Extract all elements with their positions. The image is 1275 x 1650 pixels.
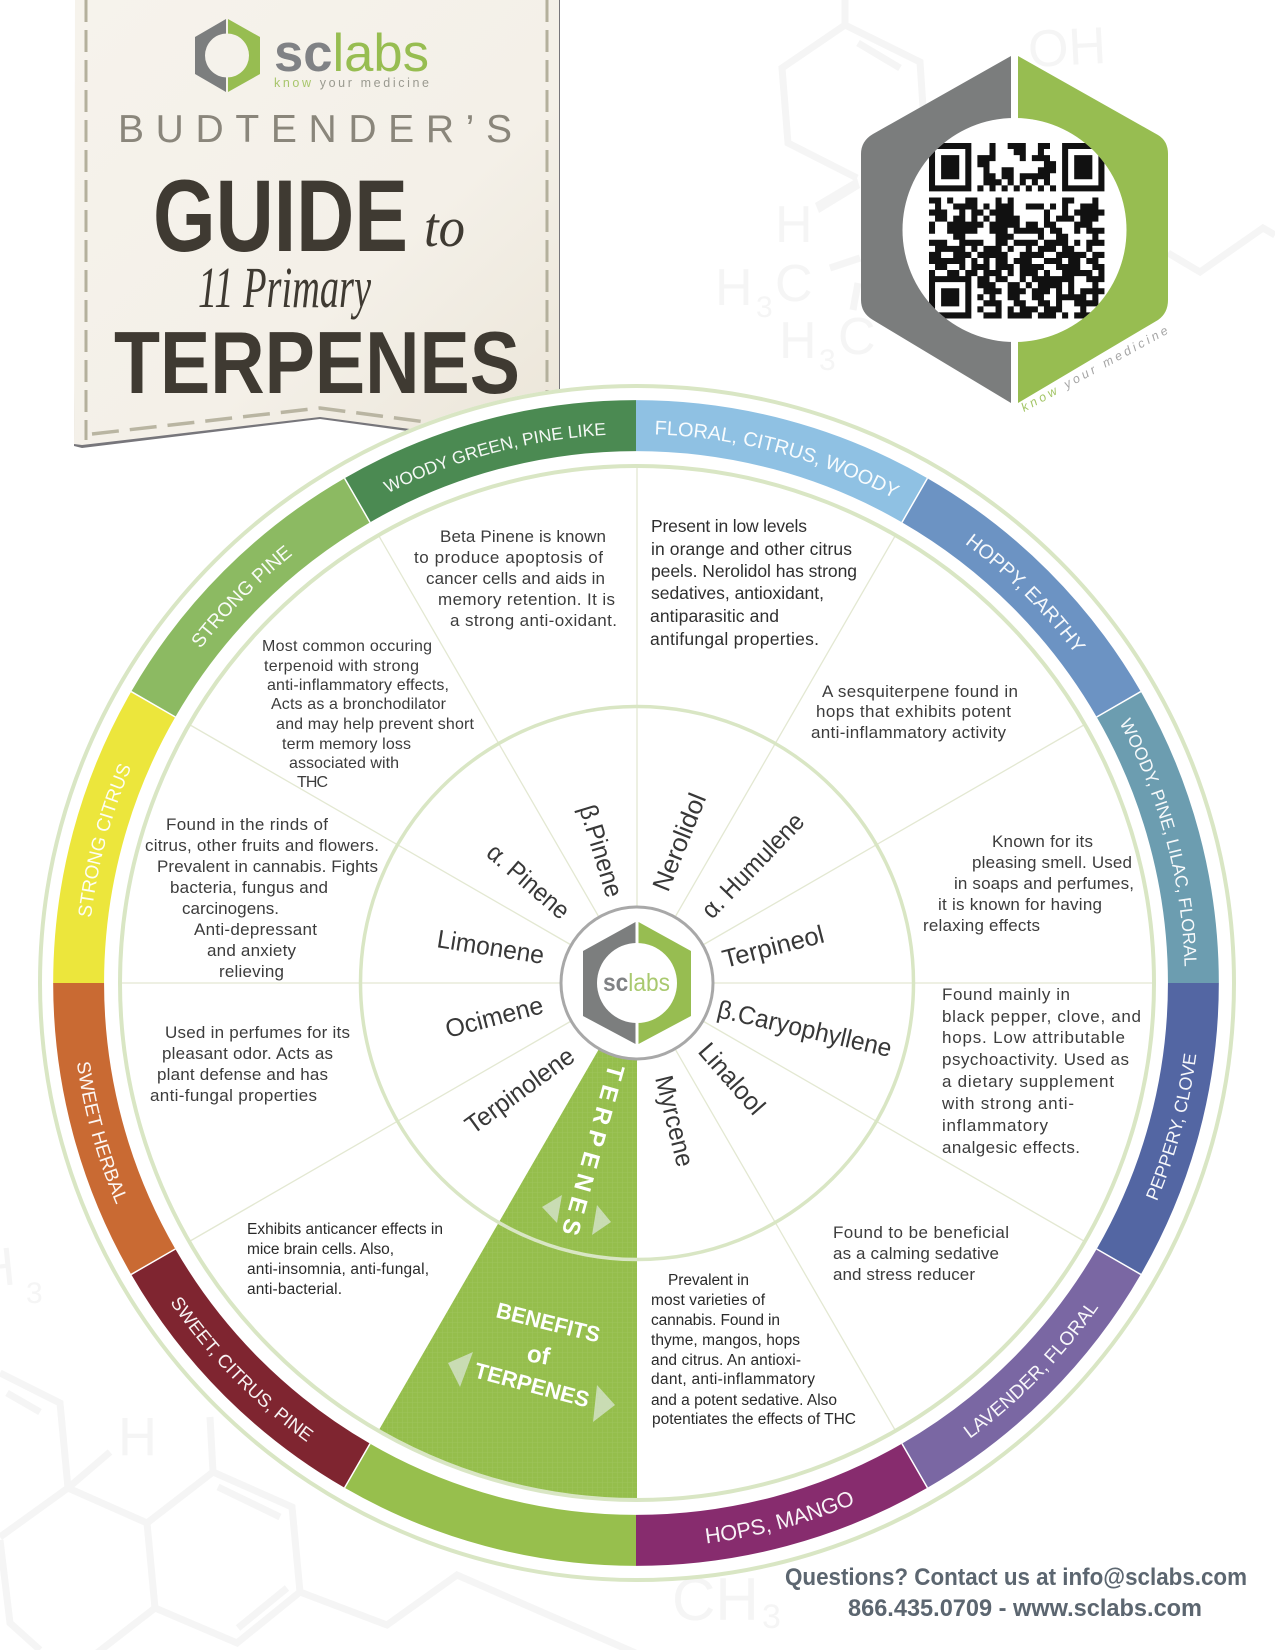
band: HOPPY, EARTHY: HOPPY, EARTHY bbox=[966, 534, 1086, 650]
text: Nerolidol description: Present in low levels bbox=[651, 516, 807, 536]
text: Ocimene description: pleasant odor. Acts as bbox=[162, 1044, 333, 1063]
text: Terpineol description: pleasing smell. Used bbox=[972, 853, 1132, 872]
title: GUIDE: GUIDE bbox=[153, 159, 408, 273]
band inner ring bbox=[120, 466, 1154, 1500]
band: WOODY, PINE, LILAC, FLORAL bbox=[1096, 692, 1219, 983]
text: Limonene description: relieving bbox=[219, 962, 284, 981]
text: Limonene description: citrus, other fruits and flowers. bbox=[145, 836, 379, 855]
band: FLORAL, CITRUS, WOODY: FLORAL, CITRUS, WOODY bbox=[656, 420, 900, 496]
text: Nerolidol description: sedatives, antioxidant, bbox=[651, 583, 824, 603]
arrow left bbox=[542, 1195, 562, 1223]
hexagon right half bbox=[1018, 56, 1168, 403]
terpene names bbox=[435, 789, 894, 1170]
text: Myrcene description: and citrus. An antioxi- bbox=[651, 1352, 801, 1369]
arrow right bbox=[593, 1385, 615, 1422]
background molecule: top right: OH bbox=[1027, 17, 1108, 79]
name circle ring bbox=[360, 706, 914, 1260]
background molecule: top right: C bbox=[838, 308, 876, 366]
name: Linalool: Linalool bbox=[692, 1037, 770, 1121]
wedge label: TERPENES: TERPENES bbox=[556, 1061, 629, 1238]
band: HOPPY, EARTHY bbox=[902, 478, 1141, 717]
wedge label: BENEFITS of TERPENES: BENEFITS bbox=[494, 1298, 603, 1347]
outer ring bbox=[40, 386, 1234, 1580]
background molecule: top right: H bbox=[775, 196, 813, 254]
text: Nerolidol description bbox=[650, 516, 857, 649]
text: Linalool description bbox=[833, 1223, 1009, 1284]
text: Myrcene description: and a potent sedative. Also bbox=[651, 1392, 837, 1409]
wedge label: BENEFITS of TERPENES bbox=[448, 1298, 615, 1422]
QR code hexagon bbox=[861, 56, 1170, 415]
text: Nerolidol description: peels. Nerolidol has strong bbox=[651, 561, 857, 581]
text: alpha Pinene description: THC bbox=[297, 774, 328, 791]
text: Caryophyllene description: hops. Low attributable bbox=[942, 1028, 1125, 1047]
title bbox=[114, 159, 520, 412]
wedge label: BENEFITS of TERPENES: of bbox=[525, 1340, 553, 1371]
text: Limonene description bbox=[145, 815, 379, 981]
text: Ocimene description bbox=[150, 1023, 350, 1105]
arrow right bbox=[592, 1205, 611, 1235]
band: green blank bbox=[345, 1444, 636, 1566]
text: alpha Pinene description: term memory loss bbox=[282, 736, 411, 753]
text: Myrcene description bbox=[651, 1272, 856, 1428]
band: HOPS, MANGO: HOPS, MANGO bbox=[706, 1492, 852, 1544]
background molecule: top right: H bbox=[779, 312, 817, 370]
ribbon banner bbox=[74, 0, 560, 452]
text: Limonene description: Found in the rinds of bbox=[166, 815, 328, 834]
text: beta Pinene description bbox=[414, 527, 617, 630]
text: Ocimene description: plant defense and has bbox=[157, 1065, 328, 1084]
text: beta Pinene description: cancer cells and aids in bbox=[426, 569, 605, 588]
name: Myrcene: Myrcene bbox=[649, 1073, 699, 1170]
footer contact: Questions? Contact us at info@sclabs.com bbox=[785, 1564, 1247, 1591]
text: Terpineol description: relaxing effects bbox=[923, 916, 1040, 935]
text: Limonene description: Prevalent in cannabis. Fights bbox=[157, 857, 378, 876]
name: alpha Pinene: α. Pinene bbox=[481, 838, 575, 925]
text: Linalool description: and stress reducer bbox=[833, 1265, 975, 1284]
text: Terpinolene description bbox=[247, 1221, 443, 1298]
text: Terpineol description: Known for its bbox=[992, 832, 1093, 851]
tagline: know your medicine bbox=[274, 76, 429, 90]
text: Limonene description: and anxiety bbox=[207, 941, 296, 960]
band: SWEET, CITRUS, PINE: SWEET, CITRUS, PINE bbox=[172, 1297, 314, 1442]
band: STRONG PINE: STRONG PINE bbox=[192, 545, 292, 647]
arrow left bbox=[448, 1352, 473, 1387]
text: alpha Pinene description: Most common occuring bbox=[262, 638, 432, 655]
text: Humulene description: A sesquiterpene found in bbox=[822, 682, 1018, 701]
band: WOODY GREEN, PINE LIKE: WOODY GREEN, PINE LIKE bbox=[382, 423, 606, 492]
wheel white disc bbox=[38, 384, 1236, 1582]
text: Terpinolene description: anti-insomnia, anti-fungal, bbox=[247, 1261, 429, 1278]
text: Terpineol description: in soaps and perfumes, bbox=[954, 874, 1134, 893]
text: Nerolidol description: in orange and other citrus bbox=[651, 539, 852, 559]
band: SWEET HERBAL bbox=[53, 983, 176, 1274]
footer contact bbox=[785, 1564, 1247, 1622]
text: Ocimene description: Used in perfumes for its bbox=[165, 1023, 350, 1042]
band: STRONG PINE bbox=[131, 478, 370, 717]
background molecule: bottom left: 3 bbox=[26, 1277, 43, 1310]
aroma band bbox=[53, 400, 1219, 1566]
text: Terpineol description: it is known for having bbox=[938, 895, 1102, 914]
text: Myrcene description: most varieties of bbox=[651, 1292, 766, 1309]
text: beta Pinene description: memory retention. It is bbox=[438, 590, 615, 609]
background molecule: top right: 3 bbox=[756, 291, 773, 324]
text: Limonene description: Anti-depressant bbox=[194, 920, 317, 939]
background molecule: top right bbox=[715, 0, 1275, 377]
name: Limonene: Limonene bbox=[435, 925, 546, 970]
text: Myrcene description: Prevalent in bbox=[668, 1272, 749, 1289]
green wedge bbox=[378, 1050, 637, 1500]
band: LAVENDER, FLORAL bbox=[902, 1249, 1141, 1488]
name: beta Caryophyllene: β.Caryophyllene bbox=[715, 996, 894, 1063]
text: Caryophyllene description: Found mainly in bbox=[942, 985, 1070, 1004]
icon: logo hexagon bbox=[195, 19, 260, 92]
band: STRONG CITRUS bbox=[53, 692, 176, 983]
name: beta Pinene: β.Pinene bbox=[573, 802, 628, 901]
tagline: know your medicine: know your medicine bbox=[1019, 323, 1170, 415]
hub wordmark: sclabs bbox=[603, 969, 670, 997]
text: Limonene description: carcinogens. bbox=[182, 899, 279, 918]
text: alpha Pinene description: terpenoid with strong bbox=[264, 658, 419, 675]
footer contact: 866.435.0709 - www.sclabs.com bbox=[848, 1595, 1202, 1622]
text: Caryophyllene description: psychoactivity. Used as bbox=[942, 1050, 1129, 1069]
background molecule: bottom left: H bbox=[118, 1407, 157, 1467]
text: Myrcene description: dant, anti-inflammatory bbox=[651, 1371, 815, 1388]
text: alpha Pinene description: associated with bbox=[289, 755, 399, 772]
text: Nerolidol description: antiparasitic and bbox=[650, 606, 779, 626]
text: Limonene description: bacteria, fungus and bbox=[170, 878, 328, 897]
title: TERPENES: TERPENES bbox=[114, 313, 520, 412]
name: Terpinolene: Terpinolene bbox=[460, 1042, 580, 1140]
text: alpha Pinene description: and may help prevent short bbox=[276, 716, 475, 733]
QR code bbox=[929, 146, 1104, 315]
band: STRONG CITRUS: STRONG CITRUS bbox=[78, 764, 130, 917]
background molecule: bottom left: CH bbox=[672, 1566, 759, 1633]
terpene wheel bbox=[38, 384, 1236, 1582]
text: Caryophyllene description: with strong anti- bbox=[941, 1094, 1074, 1113]
text: beta Pinene description: to produce apoptosis of bbox=[414, 548, 603, 567]
band: LAVENDER, FLORAL: LAVENDER, FLORAL bbox=[963, 1305, 1098, 1438]
background molecule: bottom left bbox=[0, 1236, 781, 1650]
logo: sclabs bbox=[195, 19, 429, 92]
band: FLORAL, CITRUS, WOODY bbox=[636, 400, 928, 522]
text: Myrcene description: thyme, mangos, hops bbox=[651, 1332, 800, 1349]
text: Caryophyllene description bbox=[941, 985, 1141, 1157]
name: alpha Humulene: α. Humulene bbox=[696, 808, 810, 924]
text: beta Pinene description: a strong anti-oxidant. bbox=[450, 611, 617, 630]
white circle bbox=[902, 118, 1126, 342]
text: Terpineol description bbox=[923, 832, 1134, 935]
text: Caryophyllene description: black pepper, clove, and bbox=[942, 1007, 1141, 1026]
band: PEPPERY, CLOVE: PEPPERY, CLOVE bbox=[1146, 1054, 1196, 1200]
heading: BUDTENDER'S: BUDTENDER’S bbox=[118, 108, 512, 151]
name: Terpineol: Terpineol bbox=[719, 921, 827, 974]
text: Humulene description: hops that exhibits potent bbox=[816, 702, 1011, 721]
text: Myrcene description: cannabis. Found in bbox=[651, 1312, 780, 1329]
background molecule: top right: C bbox=[775, 255, 813, 313]
text: Caryophyllene description: a dietary supplement bbox=[942, 1072, 1114, 1091]
text: Myrcene description: potentiates the effects of THC bbox=[652, 1411, 856, 1428]
text: alpha Pinene description: Acts as a bronchodilator bbox=[271, 696, 447, 713]
text: Terpinolene description: Exhibits anticancer effects in bbox=[247, 1221, 443, 1238]
wedge label: BENEFITS of TERPENES: TERPENES bbox=[472, 1358, 592, 1412]
band: SWEET, CITRUS, PINE bbox=[131, 1249, 370, 1488]
text: Terpinolene description: mice brain cells. Also, bbox=[247, 1241, 394, 1258]
center hub bbox=[561, 907, 713, 1059]
background molecule: bottom left: 3 bbox=[762, 1598, 781, 1636]
band: PEPPERY, CLOVE bbox=[1096, 983, 1219, 1274]
band: WOODY GREEN, PINE LIKE bbox=[344, 400, 636, 522]
name: Nerolidol: Nerolidol bbox=[648, 789, 712, 895]
band: SWEET HERBAL: SWEET HERBAL bbox=[77, 1062, 126, 1204]
title: 11 Primary: 11 Primary bbox=[198, 255, 371, 320]
hexagon left half bbox=[861, 56, 1011, 403]
text: Ocimene description: anti-fungal properties bbox=[150, 1086, 317, 1105]
text: Caryophyllene description: inflammatory bbox=[942, 1116, 1048, 1135]
name: Ocimene: Ocimene bbox=[442, 992, 546, 1044]
band: HOPS, MANGO bbox=[636, 1444, 928, 1566]
text: Linalool description: Found to be beneficial bbox=[833, 1223, 1009, 1242]
text: beta Pinene description: Beta Pinene is known bbox=[440, 527, 606, 546]
text: Nerolidol description: antifungal properties. bbox=[650, 629, 819, 649]
text: Linalool description: as a calming sedative bbox=[833, 1244, 999, 1263]
text: Terpinolene description: anti-bacterial. bbox=[247, 1281, 342, 1298]
band: WOODY, PINE, LILAC, FLORAL: WOODY, PINE, LILAC, FLORAL bbox=[1121, 717, 1196, 966]
background molecule: top right: 3 bbox=[819, 344, 836, 377]
text: Humulene description: anti-inflammatory activity bbox=[811, 723, 1006, 742]
title: to: to bbox=[424, 197, 465, 259]
text: Humulene description bbox=[811, 682, 1018, 742]
text: Caryophyllene description: analgesic effects. bbox=[942, 1138, 1080, 1157]
logo wordmark: sclabs bbox=[274, 24, 429, 83]
text: alpha Pinene description: anti-inflammatory effects, bbox=[267, 677, 449, 694]
background molecule: top right: H bbox=[715, 259, 753, 317]
text: alpha Pinene description bbox=[262, 638, 475, 791]
